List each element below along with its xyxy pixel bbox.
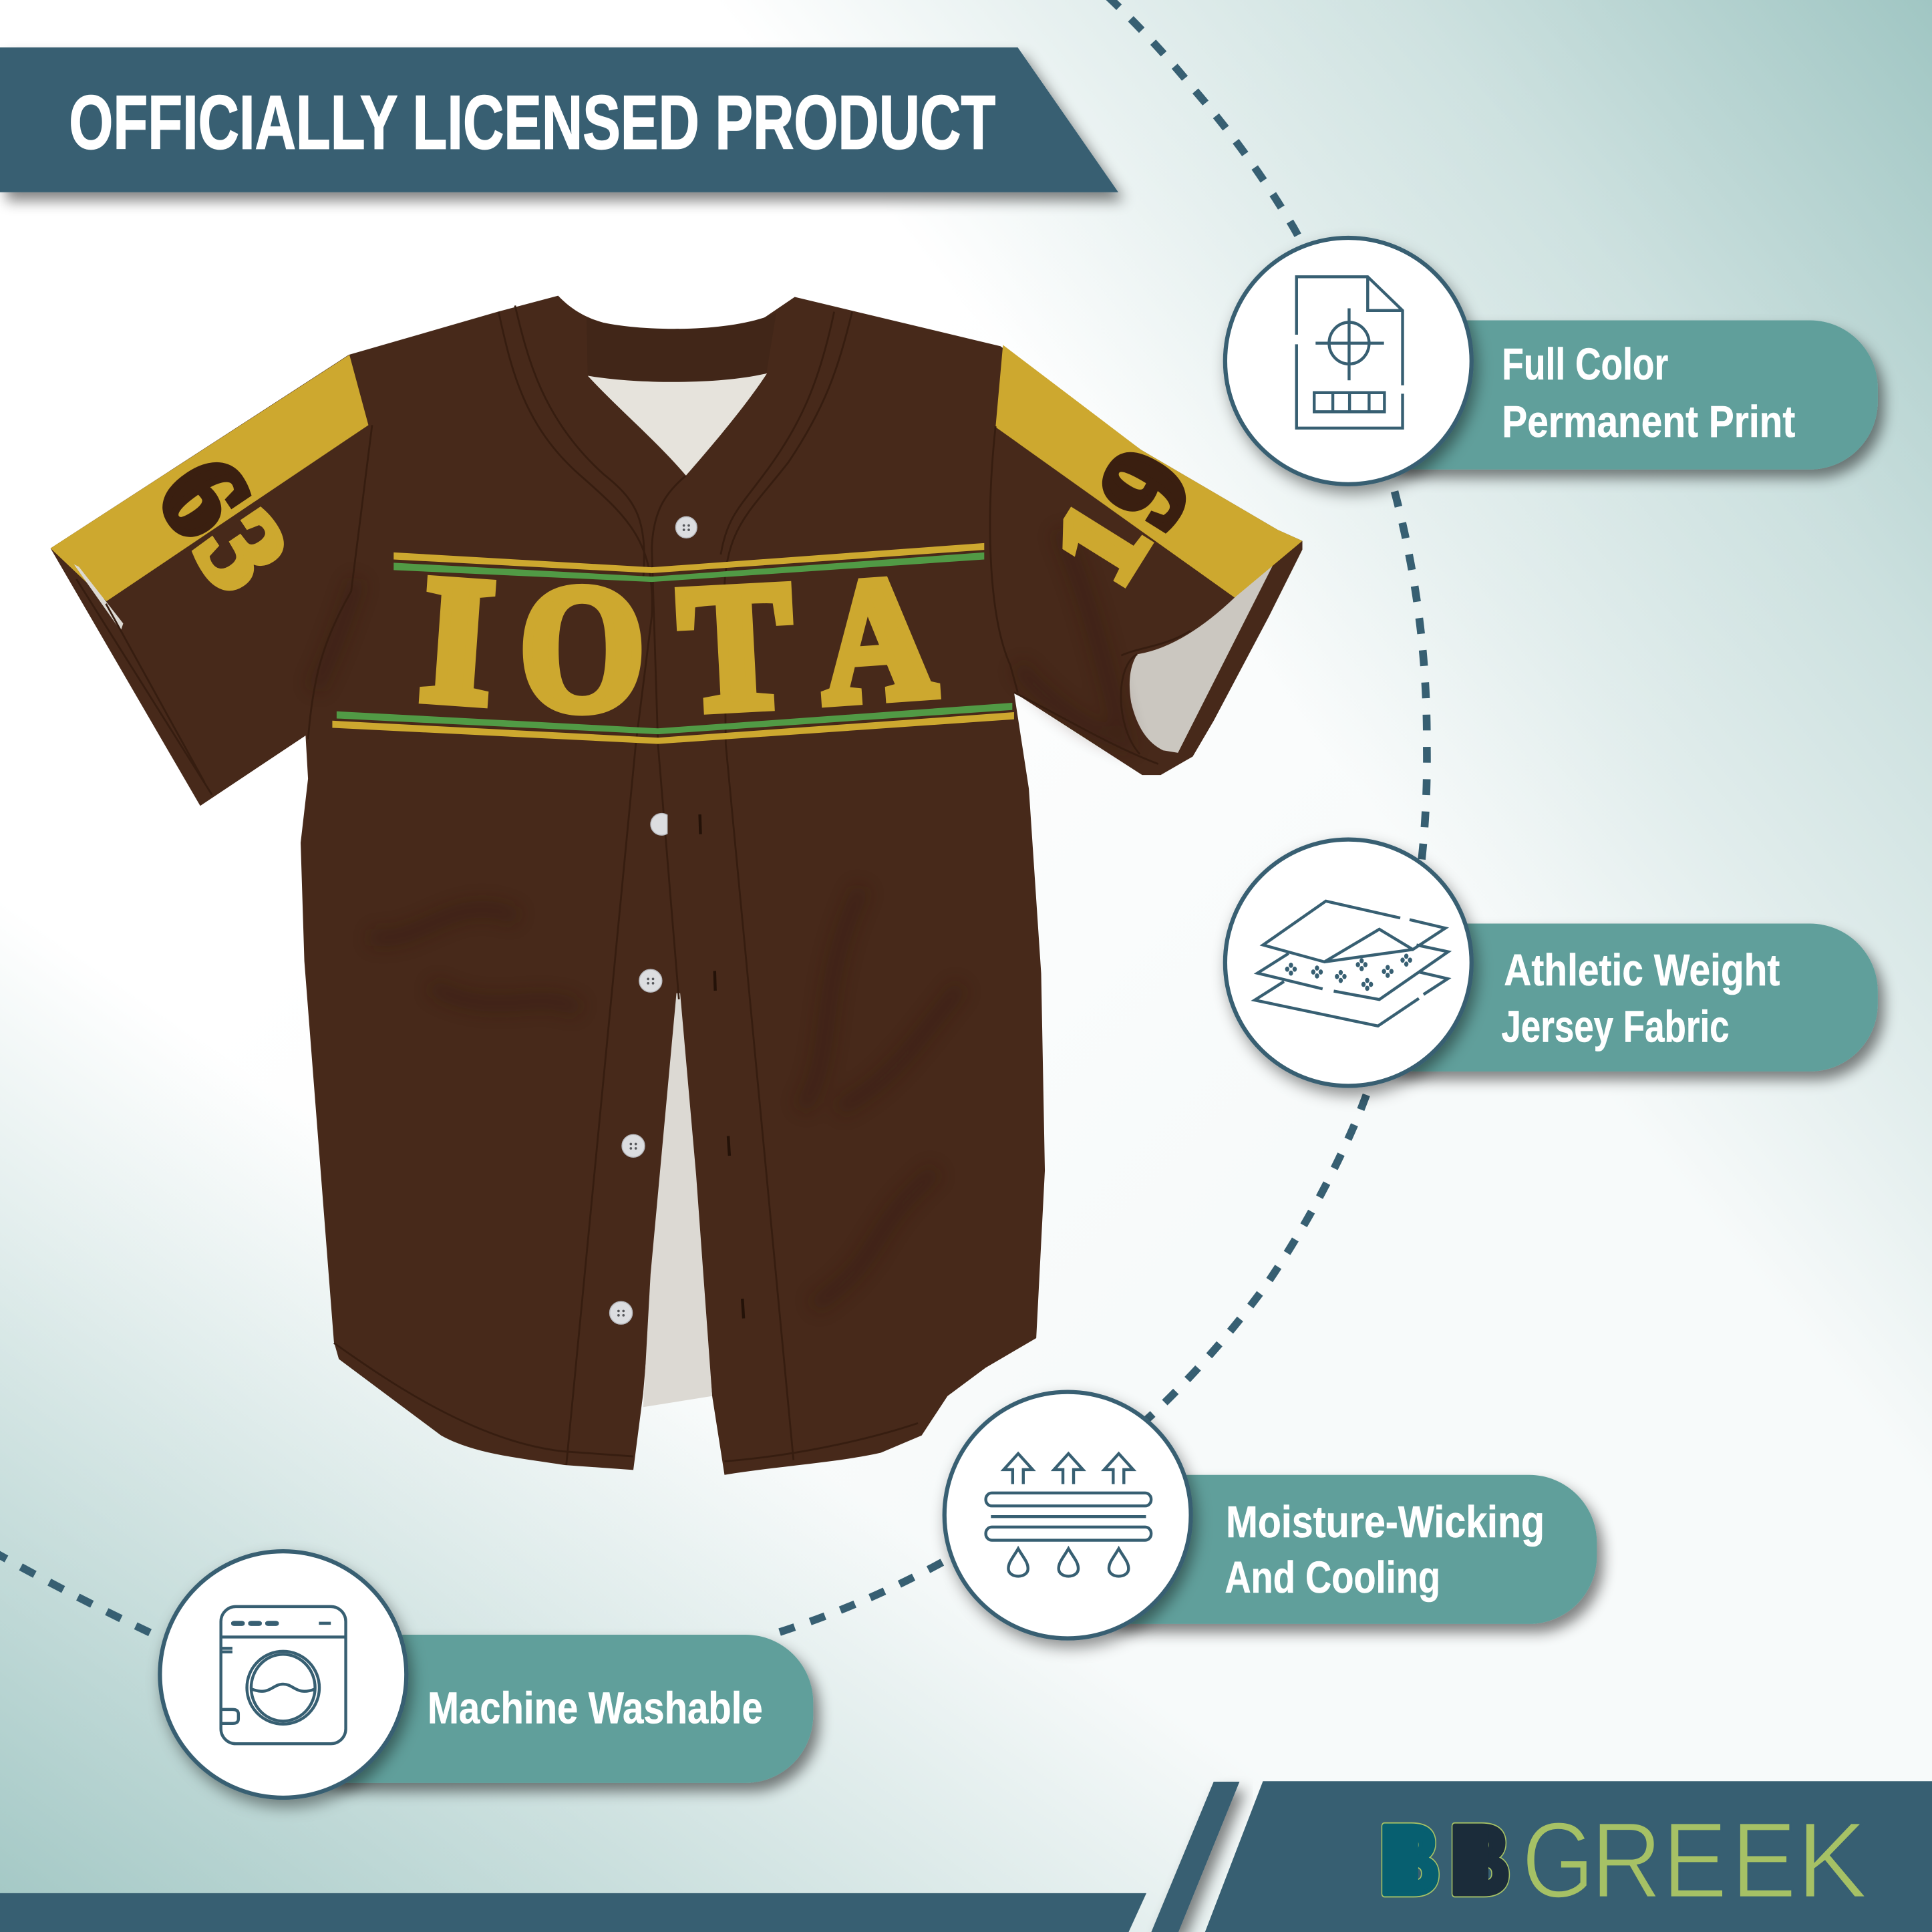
sleeve number 63: 3 xyxy=(170,489,315,613)
feature: machine washable xyxy=(160,1551,813,1798)
shirt interior at neck xyxy=(588,373,767,476)
buttonholes xyxy=(700,814,744,1318)
icon: moisture wicking xyxy=(986,1454,1151,1576)
upper green stripe xyxy=(393,552,984,582)
lower gold stripe xyxy=(332,712,1014,744)
shirt interior at slit xyxy=(643,993,712,1407)
logo BB mark: B xyxy=(1449,1805,1510,1915)
chest lettering IOTA xyxy=(416,538,940,750)
sleeve number 19: 9 xyxy=(1072,428,1218,549)
logo word GREEK: G xyxy=(1522,1800,1595,1921)
left sleeve lining xyxy=(74,565,123,631)
feature: athletic weight fabric xyxy=(1225,840,1878,1086)
chest lettering IOTA: I xyxy=(416,538,500,742)
icon circle xyxy=(1225,238,1472,484)
lower green stripe xyxy=(337,703,1012,734)
label: And Cooling xyxy=(1225,1553,1440,1603)
logo xyxy=(1379,1800,1868,1921)
icon: fabric layers xyxy=(1255,901,1448,1026)
icon: print document xyxy=(1297,277,1403,428)
logo BB mark: B xyxy=(1379,1805,1440,1915)
pill xyxy=(1348,321,1878,470)
icon circle xyxy=(160,1551,406,1798)
button holes xyxy=(617,524,690,1317)
bottom left bar xyxy=(0,1893,1146,1932)
title text: OFFICIALLY LICENSED PRODUCT xyxy=(69,80,995,166)
feature: full color print xyxy=(1225,238,1878,484)
feature: moisture wicking xyxy=(945,1392,1597,1638)
chest lettering IOTA: A xyxy=(814,538,940,740)
sleeve number 19 xyxy=(1028,428,1218,604)
label: Full Color xyxy=(1502,340,1668,389)
sleeve number 63: 6 xyxy=(132,434,277,559)
label: Permanent Print xyxy=(1502,397,1795,447)
logo word GREEK: R xyxy=(1591,1800,1662,1921)
logo word GREEK: K xyxy=(1796,1800,1868,1921)
icon: washing machine xyxy=(221,1607,346,1744)
label: Jersey Fabric xyxy=(1501,1003,1730,1052)
jersey xyxy=(51,296,1303,1475)
label xyxy=(1225,1498,1545,1603)
label xyxy=(1502,340,1795,447)
logo word GREEK: E xyxy=(1662,1800,1728,1921)
logo BB mark xyxy=(1379,1805,1510,1915)
dashed connector arc xyxy=(766,0,1427,1636)
placket and collar seams xyxy=(76,305,1190,1465)
logo word GREEK xyxy=(1522,1800,1868,1921)
pill xyxy=(1067,1475,1597,1624)
dashed connector arc left segment xyxy=(0,1551,158,1636)
chest stripes xyxy=(332,543,1014,744)
pill xyxy=(1348,924,1878,1072)
jersey silhouette xyxy=(51,296,1303,1475)
right gold shoulder band xyxy=(995,345,1303,598)
upper gold stripe xyxy=(393,543,984,573)
bottom right footer panel xyxy=(1205,1781,1932,1932)
label xyxy=(1501,946,1780,1052)
label: Athletic Weight xyxy=(1504,946,1780,995)
collar band shade xyxy=(587,313,776,382)
logo BB mark: B xyxy=(1379,1805,1440,1915)
bottom slanted stripe xyxy=(1151,1782,1239,1932)
icon circle xyxy=(1225,840,1472,1086)
logo BB mark: B xyxy=(1449,1805,1510,1915)
title banner xyxy=(0,47,1118,192)
sleeve number 19: 1 xyxy=(1028,482,1174,604)
icon circle xyxy=(945,1392,1191,1638)
pill xyxy=(283,1635,813,1783)
label: Moisture-Wicking xyxy=(1226,1498,1545,1547)
right sleeve lining xyxy=(1130,548,1281,753)
chest lettering IOTA: T xyxy=(675,544,797,750)
buttons xyxy=(610,517,697,1324)
banner shape xyxy=(0,47,1118,192)
label: Machine Washable xyxy=(428,1684,763,1734)
left gold shoulder band xyxy=(51,355,368,601)
fabric folds xyxy=(314,530,1128,1306)
chest lettering IOTA: O xyxy=(520,549,645,748)
sleeve number 63 xyxy=(132,434,315,613)
logo word GREEK: E xyxy=(1731,1800,1796,1921)
